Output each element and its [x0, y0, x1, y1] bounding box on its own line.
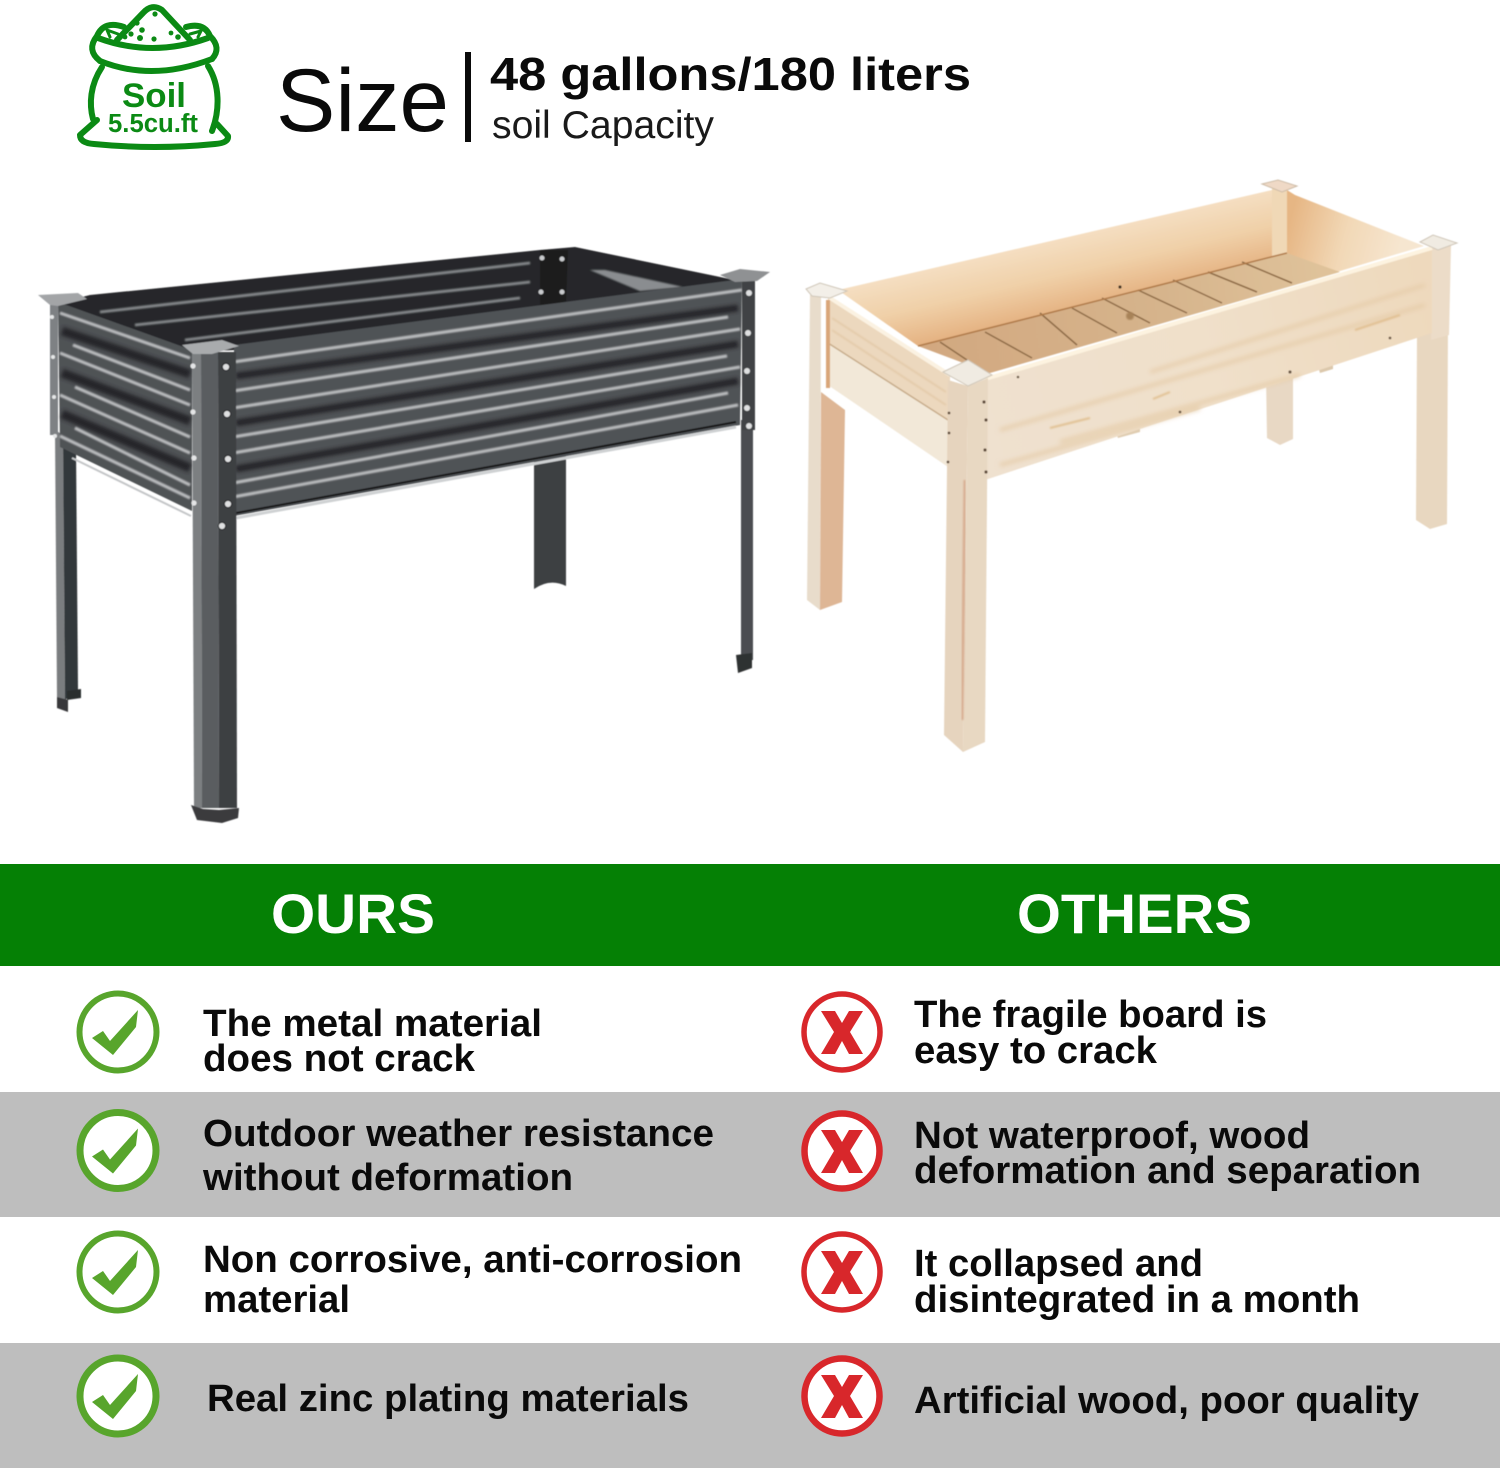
text: others row 2: [914, 1115, 1421, 1192]
heading: others: OTHERS: [1017, 882, 1252, 945]
row 2 panel: [0, 1092, 1500, 1217]
inner right wall: [1287, 190, 1424, 274]
icon: cross: [804, 1358, 880, 1434]
left wall boards: [826, 298, 950, 467]
text: others row 3: [914, 1243, 1360, 1321]
icon: soil bag 5.5cu.ft: Soil: [122, 77, 186, 115]
icon: check: [80, 1358, 156, 1434]
text: ours row 2: [202, 1113, 714, 1199]
text: ours row 4: Real zinc plating materials: [207, 1378, 689, 1420]
right corner post: [720, 269, 770, 430]
back corner post: [1272, 188, 1287, 256]
text: others row 3: disintegrated in a month: [914, 1279, 1360, 1321]
left corner post: [38, 293, 87, 438]
text: ours row 2: without deformation: [202, 1157, 573, 1199]
right leg: [1416, 245, 1451, 529]
capacity text: soil Capacity: [492, 104, 714, 147]
row 3 panel: [0, 1217, 1500, 1343]
product: natural wood planter: [806, 180, 1457, 752]
text: ours row 3: [203, 1239, 742, 1321]
icon: check: [80, 1112, 156, 1188]
text: ours row 2: Outdoor weather resistance: [203, 1113, 714, 1155]
icon: cross: [804, 1114, 880, 1188]
icon: cross: [804, 994, 880, 1070]
text: others row 2: deformation and separation: [914, 1150, 1421, 1192]
interior: [58, 247, 742, 352]
front wall boards: [985, 248, 1432, 480]
text: others row 1: The fragile board is: [914, 994, 1267, 1036]
back leg: [1266, 370, 1293, 445]
left wall corrugated panel: [58, 302, 192, 516]
heading: ours: OURS: [271, 882, 435, 945]
text: ours row 3: material: [203, 1279, 350, 1321]
heading: size: Size: [276, 50, 449, 150]
text: others row 1: easy to crack: [914, 1030, 1158, 1072]
comparison header band: [0, 864, 1500, 966]
metal corner caps: [806, 180, 1457, 386]
icon: soil bag 5.5cu.ft: [80, 7, 228, 147]
right leg: [736, 420, 753, 673]
back leg: [534, 455, 566, 589]
text: ours row 3: Non corrosive, anti-corrosion: [203, 1239, 742, 1281]
front corner post and leg: [182, 340, 239, 823]
text: others row 3: It collapsed and: [914, 1243, 1203, 1285]
left leg: [55, 430, 81, 712]
text: others row 2: Not waterproof, wood: [914, 1115, 1310, 1157]
centre support block: [1318, 362, 1333, 373]
icon: check: [80, 1234, 156, 1310]
front corner post and leg: [944, 378, 988, 752]
row 4 panel: [0, 1343, 1500, 1468]
capacity text: [490, 48, 971, 147]
left leg: [807, 295, 845, 610]
small support block: [1115, 422, 1140, 438]
front wall corrugated panel: [233, 279, 742, 518]
icon: soil bag 5.5cu.ft: 5.5cu.ft: [108, 110, 199, 138]
capacity text: 48 gallons/180 liters: [490, 48, 971, 100]
inner back wall: [838, 190, 1287, 346]
text: ours row 1: [203, 1003, 542, 1080]
icon: cross: [804, 1234, 880, 1310]
divider bar: [465, 52, 471, 142]
text: others row 4: Artificial wood, poor quality: [914, 1380, 1419, 1422]
text: ours row 1: does not crack: [203, 1038, 476, 1080]
inner floor planks: [918, 253, 1340, 373]
text: ours row 1: The metal material: [203, 1003, 542, 1045]
icon: check: [80, 994, 156, 1070]
text: others row 1: [914, 994, 1267, 1072]
row 1 panel: [0, 966, 1500, 1092]
product: grey metal planter: [38, 247, 770, 823]
